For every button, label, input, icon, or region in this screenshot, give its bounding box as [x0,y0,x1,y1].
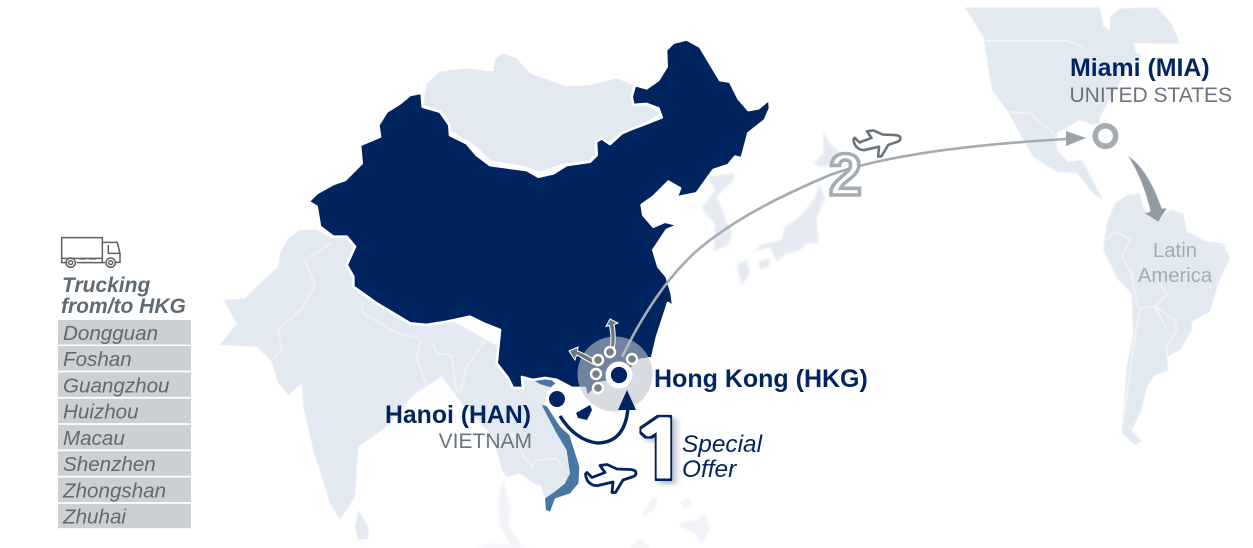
label: Miami United States: Miami (MIA) [1070,54,1210,82]
list: trucking cities: Foshan [63,348,132,371]
Hong Kong catchment circle [578,336,652,412]
heading: Trucking from/to HKG [61,274,186,318]
label: Latin America [1138,240,1213,287]
label: Latin America: America [1138,265,1213,287]
route line 2: Hong Kong to Miami [622,131,1086,357]
list: trucking cities: Huizhou [63,400,139,424]
Hainan island [576,405,592,420]
icon: truck [62,238,120,267]
marker: Hong Kong [608,364,630,386]
map: South Asia land [220,229,553,540]
list: trucking cities: Zhuhai [62,506,127,528]
label: Hong Kong: Hong Kong (HKG) [654,365,868,393]
map: North America [965,7,1180,200]
map: Vietnam highlight [534,379,579,512]
list: trucking cities: Shenzhen [63,453,156,476]
label: Hanoi Vietnam: Hanoi (HAN) [385,402,531,429]
arrow: Miami to Latin America [1128,156,1167,222]
label: Miami United States: UNITED STATES [1070,84,1232,107]
list: trucking cities: Dongguan [63,322,158,345]
trucking arrow west [569,347,595,364]
label: Hanoi Vietnam [385,402,532,453]
map: South America [1103,193,1230,445]
icon: plane for leg 2 [853,130,900,156]
label: Special Offer: Special [682,431,763,458]
map: China [308,39,770,397]
marker: Miami [1095,126,1116,146]
heading: Trucking from/to HKG: Trucking [62,274,150,297]
number 2: 2 [829,142,862,208]
trucking city markers [591,347,637,393]
map: faint southeast Asian islands [473,477,710,548]
list: trucking cities [58,320,191,528]
map: Korea and Japan [702,132,840,285]
list: trucking cities: Macau [63,427,125,450]
route line 1: Hanoi to Hong Kong [560,390,636,443]
label: Miami United States [1070,54,1232,107]
number 1: 1 [629,411,693,490]
label: Latin America: Latin [1153,240,1197,262]
label: Special Offer: Offer [682,456,737,483]
map: Mongolia [423,53,660,172]
map: Southeast Asia land [500,370,579,498]
icon: plane for leg 1 [586,464,636,492]
heading: Trucking from/to HKG: from/to HKG [61,295,186,318]
label: Hanoi Vietnam: VIETNAM [439,430,532,453]
label: Special Offer [682,431,763,483]
trucking arrow north [606,319,618,347]
list: trucking cities: Zhongshan [62,480,166,502]
list: trucking cities: Guangzhou [63,374,170,398]
marker: Hanoi [547,389,567,409]
